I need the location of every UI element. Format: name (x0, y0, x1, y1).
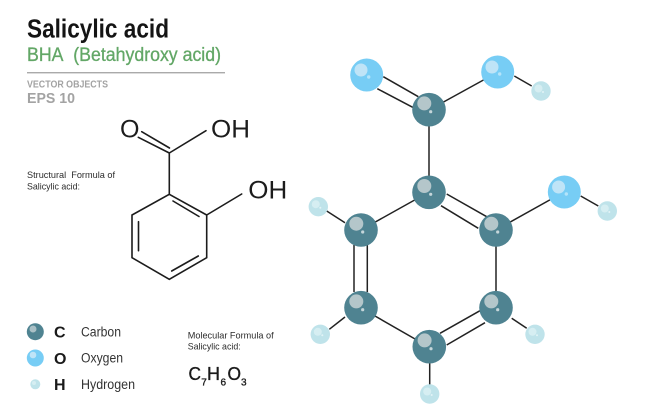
subtitle: BHA (Betahydroxy acid) (27, 45, 221, 66)
atoms: hydrogen (309, 81, 617, 404)
structural formula atom labels (120, 115, 287, 204)
molecular formula: 6 (220, 378, 226, 389)
EPS label: EPS 10 (27, 91, 75, 107)
molecular formula: C (188, 363, 201, 384)
legend (27, 323, 135, 394)
molecular formula: H (207, 363, 220, 384)
divider (27, 72, 225, 73)
legend: oxygen: Oxygen (81, 351, 123, 366)
vector objects label: VECTOR OBJECTS (27, 80, 108, 90)
structural formula skeleton (132, 131, 242, 279)
structural formula atom labels: OH (211, 116, 250, 144)
molecular formula caption (188, 330, 274, 352)
title: Salicylic acid (27, 16, 169, 44)
atoms: oxygen (350, 56, 581, 208)
molecular formula: O (228, 363, 241, 384)
structural formula atom labels: O (120, 115, 140, 143)
legend: carbon: Carbon (81, 325, 121, 340)
molecular formula: 3 (241, 378, 247, 389)
legend: oxygen (27, 350, 123, 368)
atoms: carbon (344, 93, 513, 364)
legend: carbon (27, 323, 121, 342)
3D model bonds (327, 72, 598, 385)
structural formula caption: Structural Formula of (27, 170, 115, 181)
legend: carbon: C (54, 324, 66, 342)
legend: hydrogen: Hydrogen (81, 377, 135, 392)
molecular formula (188, 363, 247, 389)
molecular formula caption: Molecular Formula of (188, 330, 274, 341)
molecular formula caption: Salicylic acid: (188, 341, 241, 352)
legend: hydrogen (30, 377, 135, 394)
legend: oxygen: O (54, 351, 66, 368)
structural formula caption (27, 170, 115, 192)
3D model atoms (309, 56, 617, 404)
legend: hydrogen: H (54, 377, 66, 394)
structural formula caption: Salicylic acid: (27, 181, 80, 192)
molecular formula: 7 (201, 378, 207, 389)
structural formula atom labels: OH (248, 176, 287, 204)
